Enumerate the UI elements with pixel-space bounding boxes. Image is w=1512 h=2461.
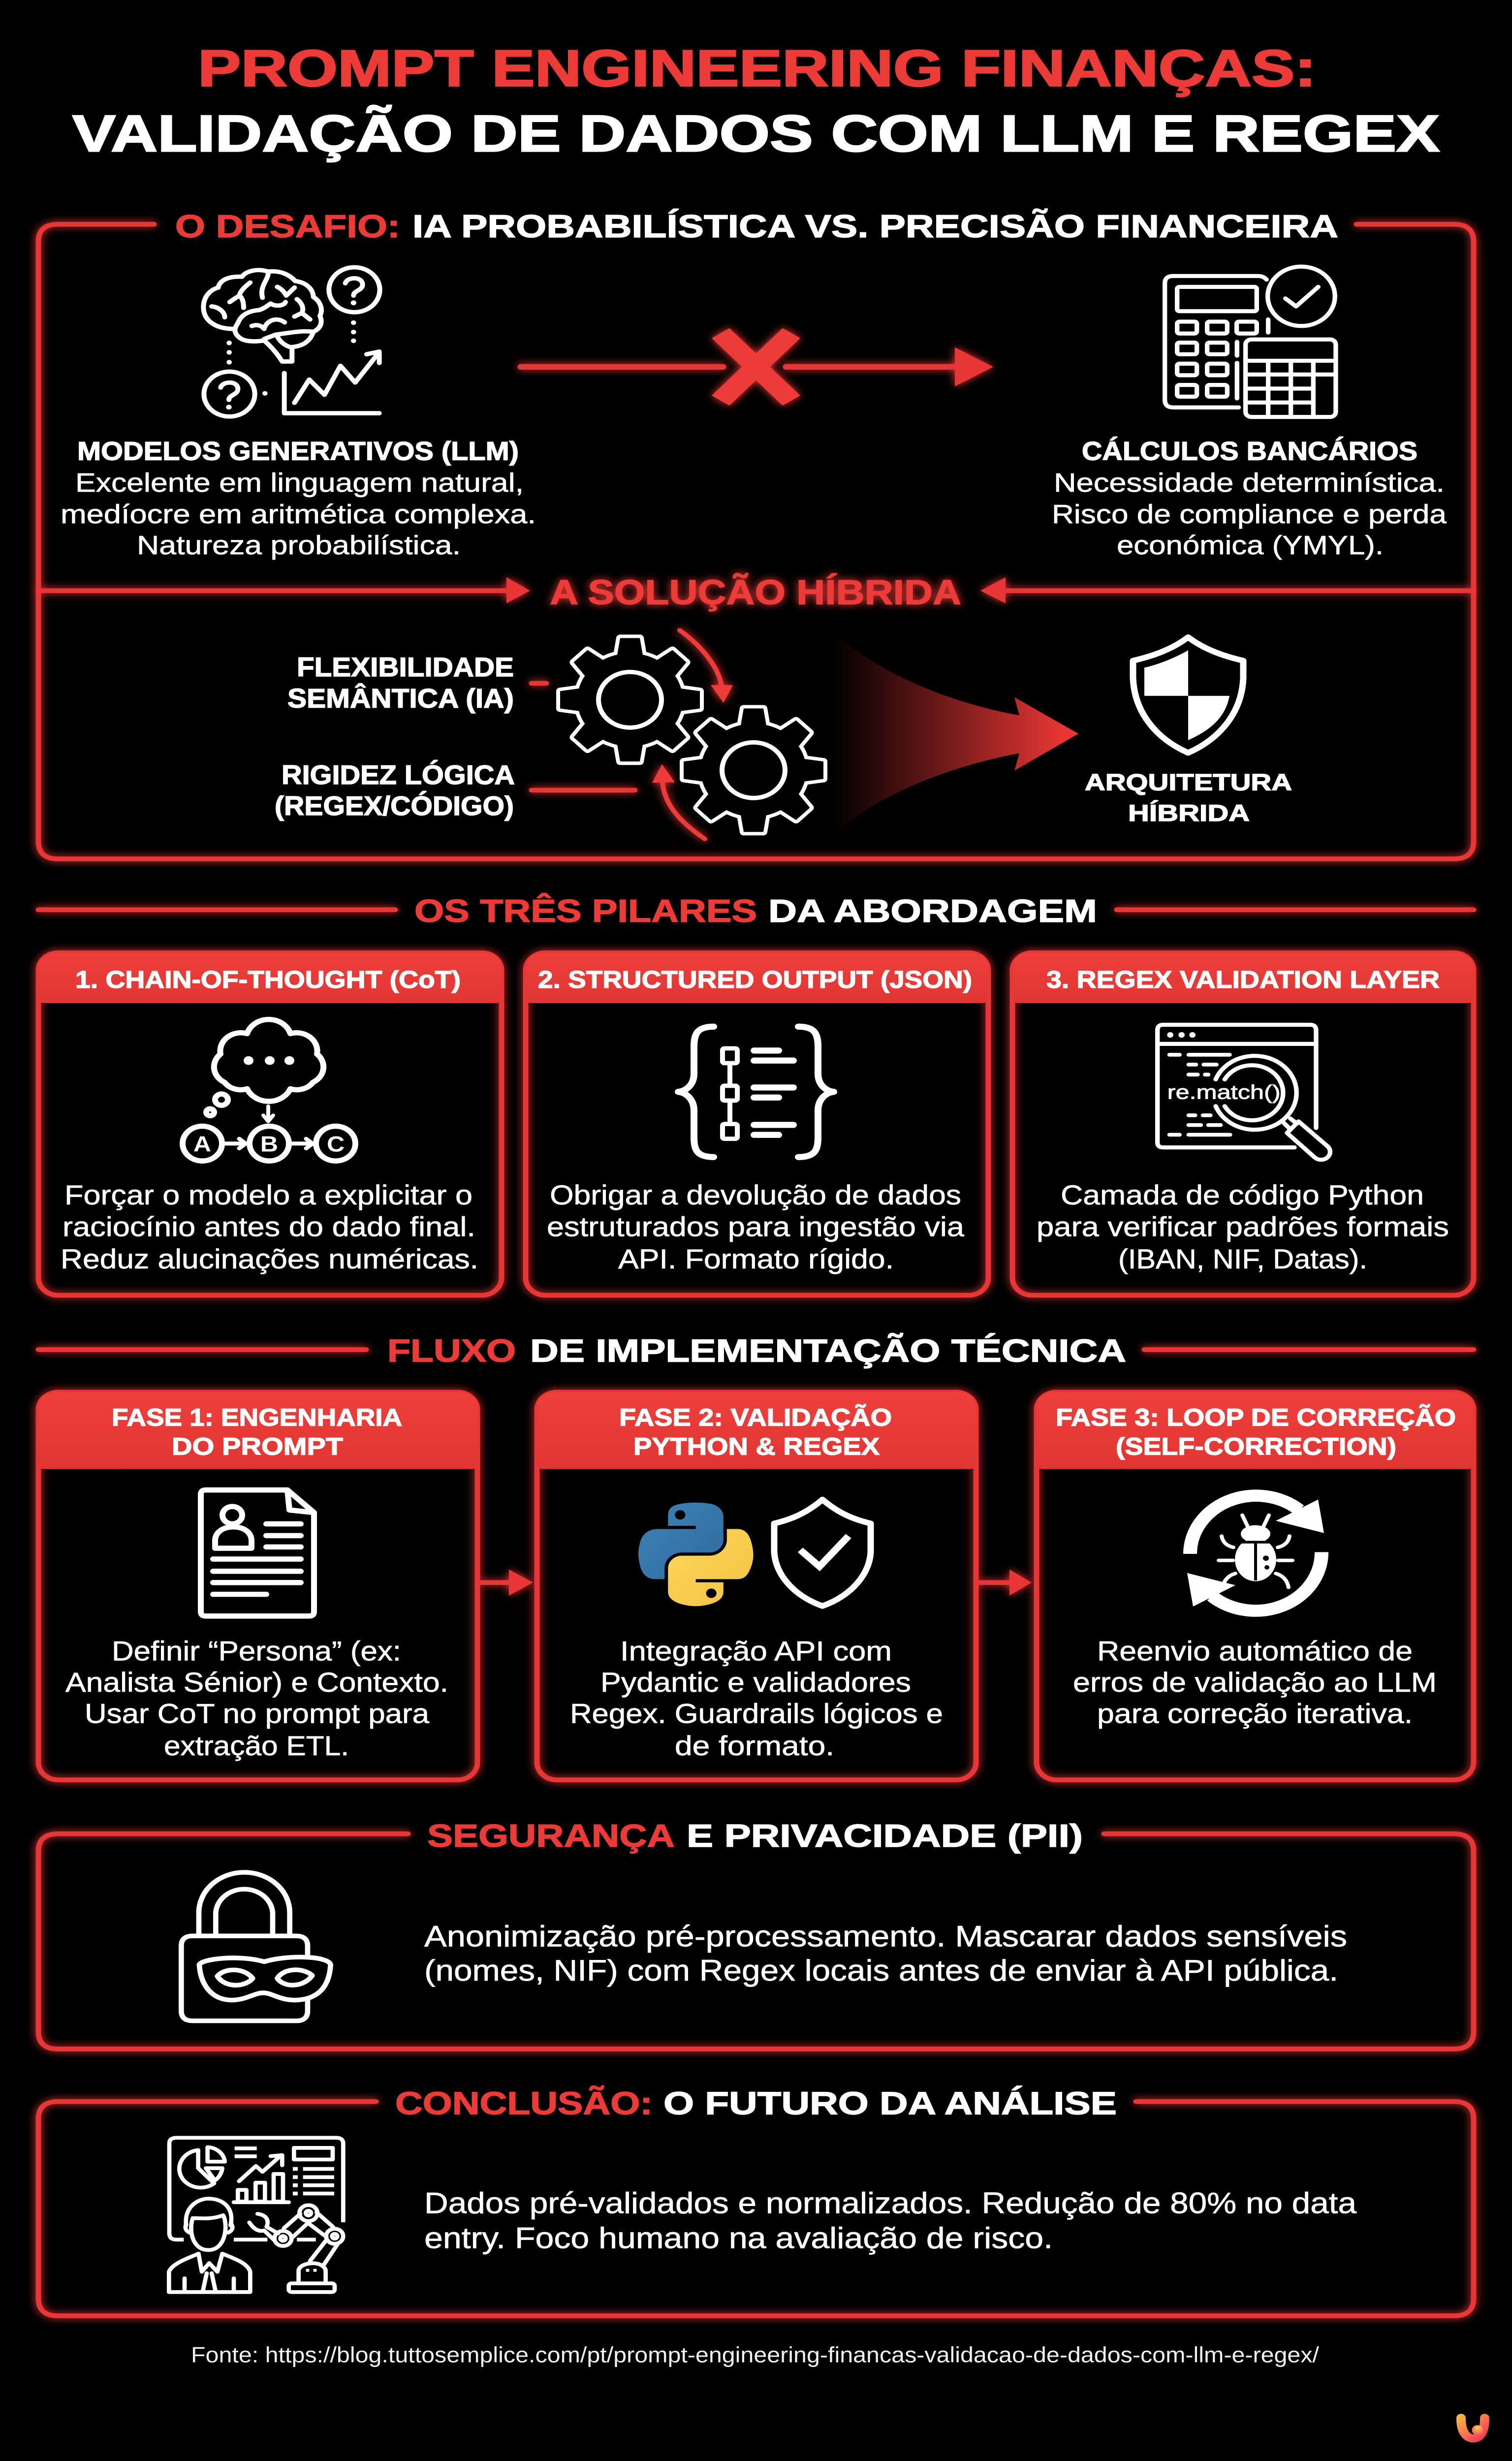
body text bbox=[65, 1636, 448, 1761]
body text: Integração API com bbox=[620, 1636, 892, 1667]
label: arquitetura hibrida: ARQUITETURA bbox=[1085, 769, 1292, 795]
panel: pillar 3 regex validation bbox=[1012, 953, 1474, 1295]
text: modelos generativos: MODELOS GENERATIVOS (LLM) bbox=[77, 437, 519, 466]
header text: 1. CHAIN-OF-THOUGHT (CoT) bbox=[75, 966, 461, 993]
body text bbox=[1073, 1636, 1437, 1729]
body text: Pydantic e validadores bbox=[600, 1667, 911, 1698]
text: calculos bancarios: CÁLCULOS BANCÁRIOS bbox=[1082, 437, 1418, 466]
header text bbox=[112, 1404, 402, 1460]
header text: PYTHON & REGEX bbox=[633, 1433, 880, 1460]
labels: flexibilidade and rigidez: FLEXIBILIDADE bbox=[297, 652, 514, 682]
header text: 3. REGEX VALIDATION LAYER bbox=[1046, 966, 1440, 993]
header text bbox=[1056, 1404, 1456, 1460]
body text: erros de validação ao LLM bbox=[1073, 1667, 1437, 1698]
panel: phase 2 python and regex bbox=[537, 1392, 976, 1780]
body text: raciocínio antes do dado final. bbox=[63, 1211, 475, 1242]
card frame bbox=[38, 1392, 477, 1780]
body text: Anonimização pré-processamento. Mascarar dados sensíveis bbox=[424, 1920, 1347, 1953]
panel: phase 3 correction loop bbox=[1037, 1392, 1474, 1780]
icon: json braces bbox=[678, 1027, 834, 1157]
source line: Fonte: https://blog.tuttosemplice.com/pt/prompt-engineering-financas-validacao-de-dados-com-llm-e-regex/ bbox=[191, 2342, 1320, 2367]
heading: CONCLUSÃO: bbox=[395, 2085, 653, 2121]
arrow blocked by red x bbox=[521, 328, 993, 406]
body text: Definir “Persona” (ex: bbox=[112, 1636, 401, 1667]
panel: conclusion bbox=[38, 2085, 1474, 2316]
text: calculos bancarios: económica (YMYL). bbox=[1117, 531, 1384, 560]
arrow: phase 2 to 3 bbox=[978, 1570, 1032, 1596]
icon: analyst, dashboard and robot arm bbox=[169, 2138, 343, 2292]
body text: entry. Foco humano na avaliação de risco. bbox=[424, 2221, 1053, 2254]
body text: Dados pré-validados e normalizados. Redução de 80% no data bbox=[424, 2186, 1356, 2220]
title bbox=[72, 39, 1440, 162]
body text bbox=[547, 1179, 965, 1274]
card header bbox=[38, 953, 502, 1003]
body text: Forçar o modelo a explicitar o bbox=[64, 1179, 472, 1210]
heading: os tres pilares: OS TRÊS PILARES bbox=[414, 892, 757, 929]
header text: DO PROMPT bbox=[172, 1433, 343, 1460]
body text bbox=[424, 2186, 1356, 2254]
panel: security and privacy bbox=[38, 1818, 1474, 2049]
labels: flexibilidade and rigidez bbox=[275, 652, 515, 821]
panel: phase 1 prompt engineering bbox=[38, 1392, 477, 1780]
panel frame bbox=[38, 2102, 1474, 2316]
divider arrows bbox=[38, 577, 1474, 603]
icon: calculator and spreadsheet bbox=[1165, 267, 1336, 417]
labels: flexibilidade and rigidez: SEMÂNTICA (IA) bbox=[287, 683, 514, 714]
body text: Reduz alucinações numéricas. bbox=[61, 1243, 478, 1274]
label: arquitetura hibrida: HÍBRIDA bbox=[1128, 800, 1250, 826]
icon: python logo bbox=[638, 1503, 753, 1606]
icon: bug in refresh loop bbox=[1187, 1496, 1324, 1611]
body text: Analista Sénior) e Contexto. bbox=[65, 1667, 448, 1698]
header text: (SELF-CORRECTION) bbox=[1116, 1433, 1396, 1460]
heading: SEGURANÇA bbox=[427, 1818, 675, 1854]
text: modelos generativos: Natureza probabilística. bbox=[137, 531, 461, 560]
body text: Reenvio automático de bbox=[1097, 1636, 1413, 1667]
heading bbox=[427, 1818, 1083, 1854]
heading bbox=[395, 2085, 1117, 2121]
body text bbox=[424, 1920, 1347, 1987]
text: modelos generativos: Excelente em linguagem natural, bbox=[75, 468, 524, 498]
heading: O FUTURO DA ANÁLISE bbox=[663, 2085, 1117, 2121]
icon: shield check bbox=[774, 1500, 871, 1606]
body text bbox=[1037, 1179, 1449, 1274]
text: calculos bancarios: Necessidade determinística. bbox=[1054, 468, 1445, 498]
card header bbox=[1037, 1392, 1474, 1469]
heading: o desafio: O DESAFIO: bbox=[175, 208, 400, 244]
body text: (IBAN, NIF, Datas). bbox=[1118, 1243, 1367, 1274]
card frame bbox=[1012, 953, 1474, 1295]
body text: (nomes, NIF) com Regex locais antes de enviar à API pública. bbox=[424, 1954, 1338, 1987]
text: calculos bancarios bbox=[1052, 437, 1447, 560]
card frame bbox=[537, 1392, 976, 1780]
heading: fluxo de implementacao: FLUXO bbox=[387, 1333, 516, 1369]
icon: code window with magnifier bbox=[1158, 1025, 1330, 1160]
header text: FASE 3: LOOP DE CORREÇÃO bbox=[1056, 1404, 1456, 1431]
heading: E PRIVACIDADE (PII) bbox=[687, 1818, 1083, 1854]
card frame bbox=[38, 953, 502, 1295]
icon: brand logo bbox=[1461, 2418, 1484, 2438]
icon: brain with question marks and chart bbox=[203, 267, 380, 416]
panel frame bbox=[38, 1834, 1474, 2049]
body text: para verificar padrões formais bbox=[1037, 1211, 1449, 1242]
heading: os tres pilares bbox=[38, 892, 1474, 929]
heading: a solucao hibrida: A SOLUÇÃO HÍBRIDA bbox=[550, 573, 961, 611]
card frame bbox=[1037, 1392, 1474, 1780]
arrow: phase 1 to 2 bbox=[480, 1570, 533, 1596]
icon: interlocking gears bbox=[560, 638, 823, 832]
panel: pillar 2 structured output bbox=[526, 953, 988, 1295]
body text: Camada de código Python bbox=[1061, 1179, 1424, 1210]
body text: Regex. Guardrails lógicos e bbox=[570, 1698, 943, 1729]
header text: 2. STRUCTURED OUTPUT (JSON) bbox=[538, 966, 972, 993]
body text: extração ETL. bbox=[164, 1730, 349, 1761]
heading: o desafio: IA PROBABILÍSTICA VS. PRECISÃO FINANCEIRA bbox=[412, 208, 1338, 244]
heading: fluxo de implementacao: DE IMPLEMENTAÇÃO TÉCNICA bbox=[530, 1333, 1126, 1369]
icon: code window with magnifier: re.match() bbox=[1167, 1081, 1281, 1104]
card frame bbox=[526, 953, 988, 1295]
body text bbox=[570, 1636, 943, 1761]
body text: estruturados para ingestão via bbox=[547, 1211, 965, 1242]
icon: thought cloud with a b c steps: C bbox=[327, 1132, 345, 1156]
icon: thought cloud with a b c steps: A bbox=[193, 1132, 211, 1156]
labels: flexibilidade and rigidez: (REGEX/CÓDIGO) bbox=[275, 790, 514, 821]
labels: flexibilidade and rigidez: RIGIDEZ LÓGICA bbox=[282, 759, 515, 790]
big gradient arrow bbox=[833, 630, 1078, 837]
card header bbox=[1012, 953, 1474, 1003]
icon: thought cloud with a b c steps: B bbox=[260, 1132, 278, 1156]
curved red arrows bbox=[652, 630, 733, 839]
label: arquitetura hibrida bbox=[1085, 769, 1292, 826]
icon: thought cloud with a b c steps bbox=[183, 1019, 355, 1161]
icon: persona document bbox=[201, 1490, 314, 1616]
title: VALIDAÇÃO DE DADOS COM LLM E REGEX bbox=[72, 104, 1440, 162]
heading: fluxo de implementacao bbox=[38, 1333, 1474, 1369]
card header bbox=[38, 1392, 477, 1469]
text: calculos bancarios: Risco de compliance e perda bbox=[1052, 500, 1447, 529]
body text: de formato. bbox=[675, 1730, 834, 1761]
panel: pillar 1 chain of thought bbox=[38, 953, 502, 1295]
text: modelos generativos: medíocre em aritmética complexa. bbox=[61, 500, 536, 529]
icon: padlock with mask bbox=[181, 1872, 331, 2021]
body text: para correção iterativa. bbox=[1097, 1698, 1413, 1729]
panel: challenge and hybrid solution bbox=[38, 208, 1474, 859]
body text: API. Formato rígido. bbox=[618, 1243, 894, 1274]
heading: os tres pilares: DA ABORDAGEM bbox=[768, 893, 1097, 929]
header text bbox=[619, 1404, 892, 1460]
header text: FASE 2: VALIDAÇÃO bbox=[619, 1404, 892, 1431]
text: modelos generativos bbox=[61, 437, 536, 560]
connector lines bbox=[532, 683, 635, 790]
header text: FASE 1: ENGENHARIA bbox=[112, 1404, 402, 1431]
body text: Obrigar a devolução de dados bbox=[550, 1179, 961, 1210]
title: PROMPT ENGINEERING FINANÇAS: bbox=[198, 39, 1316, 97]
panel frame bbox=[38, 224, 1474, 859]
card header bbox=[526, 953, 988, 1003]
icon: checkered shield bbox=[1133, 637, 1243, 753]
card header bbox=[537, 1392, 976, 1469]
body text bbox=[61, 1179, 478, 1274]
body text: Usar CoT no prompt para bbox=[85, 1698, 430, 1729]
